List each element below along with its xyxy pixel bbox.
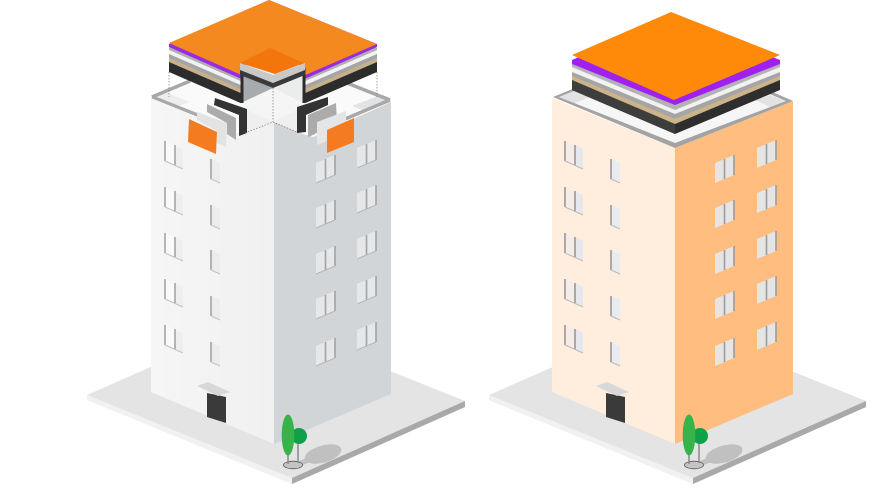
building right face orange (675, 101, 793, 444)
right building illustration: assembled roof (489, 12, 866, 484)
door right (596, 382, 629, 423)
ground slab left (87, 319, 465, 484)
tree right (683, 414, 745, 469)
layer: tan (169, 13, 377, 107)
ground slab right (489, 319, 866, 484)
windows right building, left face (565, 141, 620, 366)
layer: purple (169, 0, 377, 93)
windows left building, right face (316, 140, 376, 366)
layer: insulation black (169, 18, 377, 117)
roof parapet (553, 48, 793, 148)
layer: insulation black (572, 37, 780, 134)
door left (197, 382, 230, 423)
building left face peach (552, 98, 675, 444)
layer: gray (572, 29, 780, 119)
layer: white (572, 24, 780, 114)
roof parapet and floor (152, 81, 390, 150)
windows right building, right face (715, 140, 776, 366)
notch inner right wall (273, 76, 303, 103)
building right face (274, 102, 391, 444)
left building illustration: exploded roof (87, 0, 465, 484)
layer: orange membrane (572, 12, 780, 100)
layer: tan (572, 33, 780, 124)
layer: purple (572, 17, 780, 105)
layer: orange membrane (169, 0, 377, 89)
layer: gray thin (572, 21, 780, 110)
roof notch cut-out (240, 48, 305, 122)
tree left (282, 414, 344, 469)
building left face (151, 98, 274, 444)
orange insulation panel right (327, 118, 354, 153)
roof layers stack (169, 0, 377, 117)
layer: gray (169, 10, 377, 103)
windows left building, left face (165, 141, 220, 366)
orange insulation panel left (188, 119, 217, 154)
notch dark orange diamond (240, 48, 304, 74)
dotted guide lines (169, 72, 377, 133)
layer: gray thin (169, 4, 377, 95)
layer: white (169, 5, 377, 99)
notch inner left wall (243, 76, 273, 102)
notch black edges (242, 68, 304, 103)
exploded wall layers, right side (297, 97, 354, 153)
exploded wall layers, left side (188, 98, 247, 154)
roof layers stack (572, 12, 780, 134)
